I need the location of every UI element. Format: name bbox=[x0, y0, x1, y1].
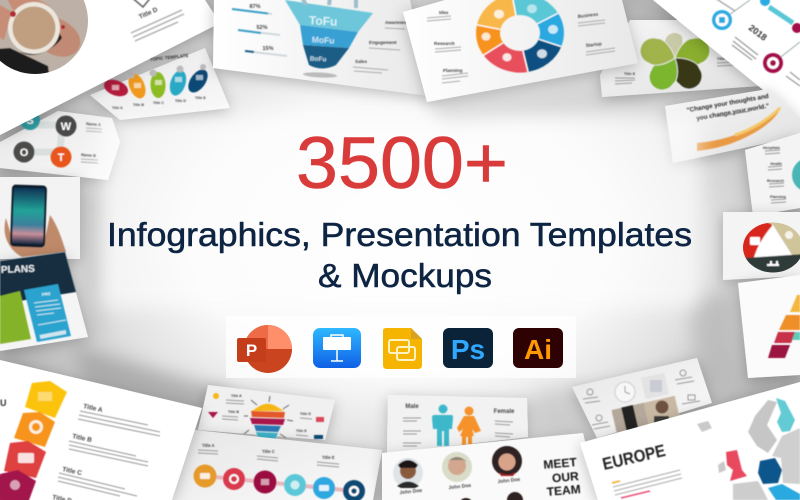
subheading line one: Infographics, Presentation Templates bbox=[107, 216, 692, 253]
chart: timeline nodes bbox=[712, 0, 800, 73]
text block: bulb labels: Title E bbox=[296, 429, 307, 433]
text block: member names: John Doe bbox=[497, 477, 521, 485]
text block: drop titles bbox=[112, 96, 206, 110]
panel: arrows slide bbox=[0, 360, 202, 500]
title panel: lighter backdrop bbox=[100, 118, 700, 308]
soft shading behind slides bbox=[70, 68, 738, 440]
icon band bbox=[226, 316, 576, 378]
text block: Europe copy bbox=[612, 470, 682, 498]
icon: S circle: S bbox=[26, 115, 34, 127]
text block: strategy labels: Name A bbox=[86, 121, 101, 127]
text block: female labels: Female bbox=[494, 409, 515, 415]
text block: timeline labels: Title E bbox=[322, 455, 335, 460]
panel: plans slide bbox=[0, 252, 88, 351]
icon: O circle: O bbox=[20, 147, 29, 159]
text block: ring labels: Idea bbox=[439, 10, 449, 15]
icon: Illustrator: Ai bbox=[524, 334, 552, 365]
text block: list labels: Research bbox=[767, 179, 785, 183]
text block: quote: "Change your thoughts and bbox=[686, 93, 769, 114]
text block: titles A to D: Title A bbox=[83, 403, 103, 414]
heading: plans: PLANS bbox=[1, 264, 35, 276]
text block: ring labels: Planning bbox=[443, 68, 463, 73]
text block: ring labels: Research bbox=[434, 41, 455, 46]
chart: funnel: ToFu bbox=[309, 13, 338, 29]
panel: Europe map slide bbox=[580, 382, 800, 500]
text block: bulb labels: Title B bbox=[228, 410, 239, 414]
text block: titles A to D bbox=[52, 403, 160, 500]
heading: meet our team bbox=[543, 455, 581, 499]
panel: blue card: PRO bbox=[42, 291, 51, 297]
chart: progress bars: 87% bbox=[249, 4, 261, 10]
heading: meet our team: TEAM bbox=[546, 482, 581, 499]
text block: quote: you change your world." bbox=[696, 103, 770, 122]
text block: funnel labels: Awareness bbox=[385, 20, 410, 25]
text block: male labels: Male bbox=[405, 404, 419, 410]
text block: drop titles: Title D bbox=[175, 99, 186, 103]
chart: progress bars: 52% bbox=[256, 25, 268, 31]
chart: Europe map bbox=[697, 398, 800, 500]
panel: circles timeline slide bbox=[172, 430, 382, 500]
panel: quote slide bbox=[665, 89, 800, 163]
icon and text: Title D bbox=[130, 0, 184, 41]
text block: drop titles: Title B bbox=[133, 103, 144, 107]
icon: Illustrator bbox=[513, 328, 563, 368]
text block: list labels: Planning bbox=[770, 195, 787, 199]
text block: drop titles: Title E bbox=[195, 96, 206, 100]
panel: bulb slide bbox=[198, 385, 335, 440]
panel: tricolour drops slide bbox=[90, 48, 230, 120]
photo: team member three bbox=[492, 446, 522, 476]
heading: meet our team: OUR bbox=[551, 469, 580, 485]
text block: ring labels: Business bbox=[578, 11, 599, 19]
icon: Keynote bbox=[313, 328, 361, 368]
text block: drop titles: Title A bbox=[112, 106, 123, 110]
text block: petal label bbox=[615, 57, 736, 84]
photo: person right bbox=[643, 396, 681, 428]
text block: left edge heading fragment: U bbox=[0, 398, 6, 408]
text block: titles A to D: Title B bbox=[72, 433, 93, 444]
heading: meet our team: MEET bbox=[543, 455, 578, 472]
icon: paint brush stroke bbox=[697, 107, 781, 151]
panel: timeline slide top right bbox=[653, 0, 800, 120]
icon: five drops bbox=[102, 64, 212, 101]
icon: Photoshop bbox=[443, 328, 493, 368]
text block: funnel labels: Sales bbox=[355, 59, 367, 64]
text block: ring labels: Startup bbox=[586, 41, 602, 48]
text block: timeline labels: Title C bbox=[262, 449, 275, 454]
icon: W circle: W bbox=[61, 121, 72, 133]
panel: WOT circles slide bbox=[0, 110, 120, 180]
chart: six connected circles bbox=[194, 464, 365, 500]
heading: Europe: EUROPE bbox=[601, 441, 667, 474]
panel: ring diagram slide bbox=[403, 0, 638, 102]
panel: list slide right bbox=[745, 133, 800, 216]
chart: funnel: MoFu bbox=[312, 34, 335, 46]
chart: progress bars bbox=[232, 4, 287, 56]
panel: stacked A slide bbox=[738, 275, 800, 378]
icon: male figure bbox=[432, 404, 453, 446]
icon: wall clock bbox=[615, 382, 635, 402]
panel: male female slide bbox=[387, 395, 528, 453]
panel: funnel slide bbox=[213, 0, 430, 96]
icon: Photoshop: Ps bbox=[451, 334, 485, 365]
photo: open book bbox=[641, 373, 669, 399]
icon: PowerPoint bbox=[237, 325, 292, 373]
icon: Google Slides bbox=[383, 328, 422, 369]
text block: funnel labels: Engagement bbox=[369, 40, 397, 45]
text block: strategy labels bbox=[81, 121, 102, 163]
text block: strategy labels: Name B bbox=[81, 152, 96, 158]
panel: coffee photo slide bbox=[0, 0, 220, 135]
chart: stacked A bbox=[768, 295, 800, 358]
heading: 3500+: 3500+ bbox=[296, 123, 508, 204]
subheading line two: & Mockups bbox=[318, 257, 492, 294]
photo: team member two bbox=[442, 452, 472, 482]
panel: phone photo slide bbox=[0, 177, 80, 259]
chart: stacked hexagons bbox=[0, 381, 67, 500]
text block: petal label: Title B bbox=[717, 57, 729, 61]
text block: funnel labels bbox=[353, 20, 410, 73]
photo: hand holding phone bbox=[5, 184, 66, 257]
text block: gallery labels bbox=[583, 370, 700, 429]
photo: person left bbox=[612, 403, 651, 436]
panel: team slide bbox=[382, 433, 600, 500]
icon: PowerPoint: P bbox=[246, 341, 257, 360]
photo: coffee cup in hands bbox=[0, 0, 90, 80]
text block: bulb labels: Title A bbox=[231, 394, 242, 398]
icon: female figure bbox=[457, 406, 481, 447]
text block: timeline labels bbox=[198, 443, 339, 467]
text block: member names bbox=[399, 477, 521, 496]
text block: year 2018: 2018 bbox=[747, 23, 769, 43]
chart: triangle ring bbox=[743, 222, 800, 272]
icon and text: Title D: Title D bbox=[138, 6, 159, 21]
text block: bulb labels bbox=[208, 393, 324, 439]
text block: bulb labels: Title D bbox=[300, 412, 311, 416]
panel: triangle ring slide bbox=[723, 212, 800, 280]
text block: list labels: Hospitals bbox=[763, 146, 780, 150]
text block: ring labels bbox=[427, 10, 615, 83]
photo: team member one bbox=[393, 458, 423, 488]
chart: progress bars: 15% bbox=[262, 46, 274, 52]
text block: timeline labels: Title A bbox=[202, 443, 215, 448]
panel: gallery slide bbox=[572, 358, 712, 438]
photo: lower row heads bbox=[459, 492, 523, 500]
chart: five petals bbox=[637, 32, 713, 95]
icon: T circle: T bbox=[58, 152, 65, 164]
text block: drop titles: Title C bbox=[153, 101, 164, 105]
panel: green card bbox=[0, 291, 31, 344]
chart: six-segment ring bbox=[476, 0, 564, 73]
text block: petal label: Title E bbox=[624, 72, 636, 76]
panel: petals slide bbox=[600, 20, 760, 97]
text block: list labels: Health bbox=[770, 162, 783, 166]
heading: topic template: TOPIC TEMPLATE bbox=[150, 53, 189, 62]
chart: funnel bbox=[285, 0, 373, 78]
text block: member names: John Doe bbox=[448, 483, 472, 491]
chart: funnel: BoFu bbox=[310, 56, 327, 63]
text block: titles A to D: Title C bbox=[62, 466, 83, 477]
text block: list labels bbox=[763, 146, 787, 203]
text block: member names: John Doe bbox=[399, 488, 423, 496]
icon: teal circle bbox=[792, 158, 800, 192]
chart: layered light bulb bbox=[244, 396, 293, 440]
